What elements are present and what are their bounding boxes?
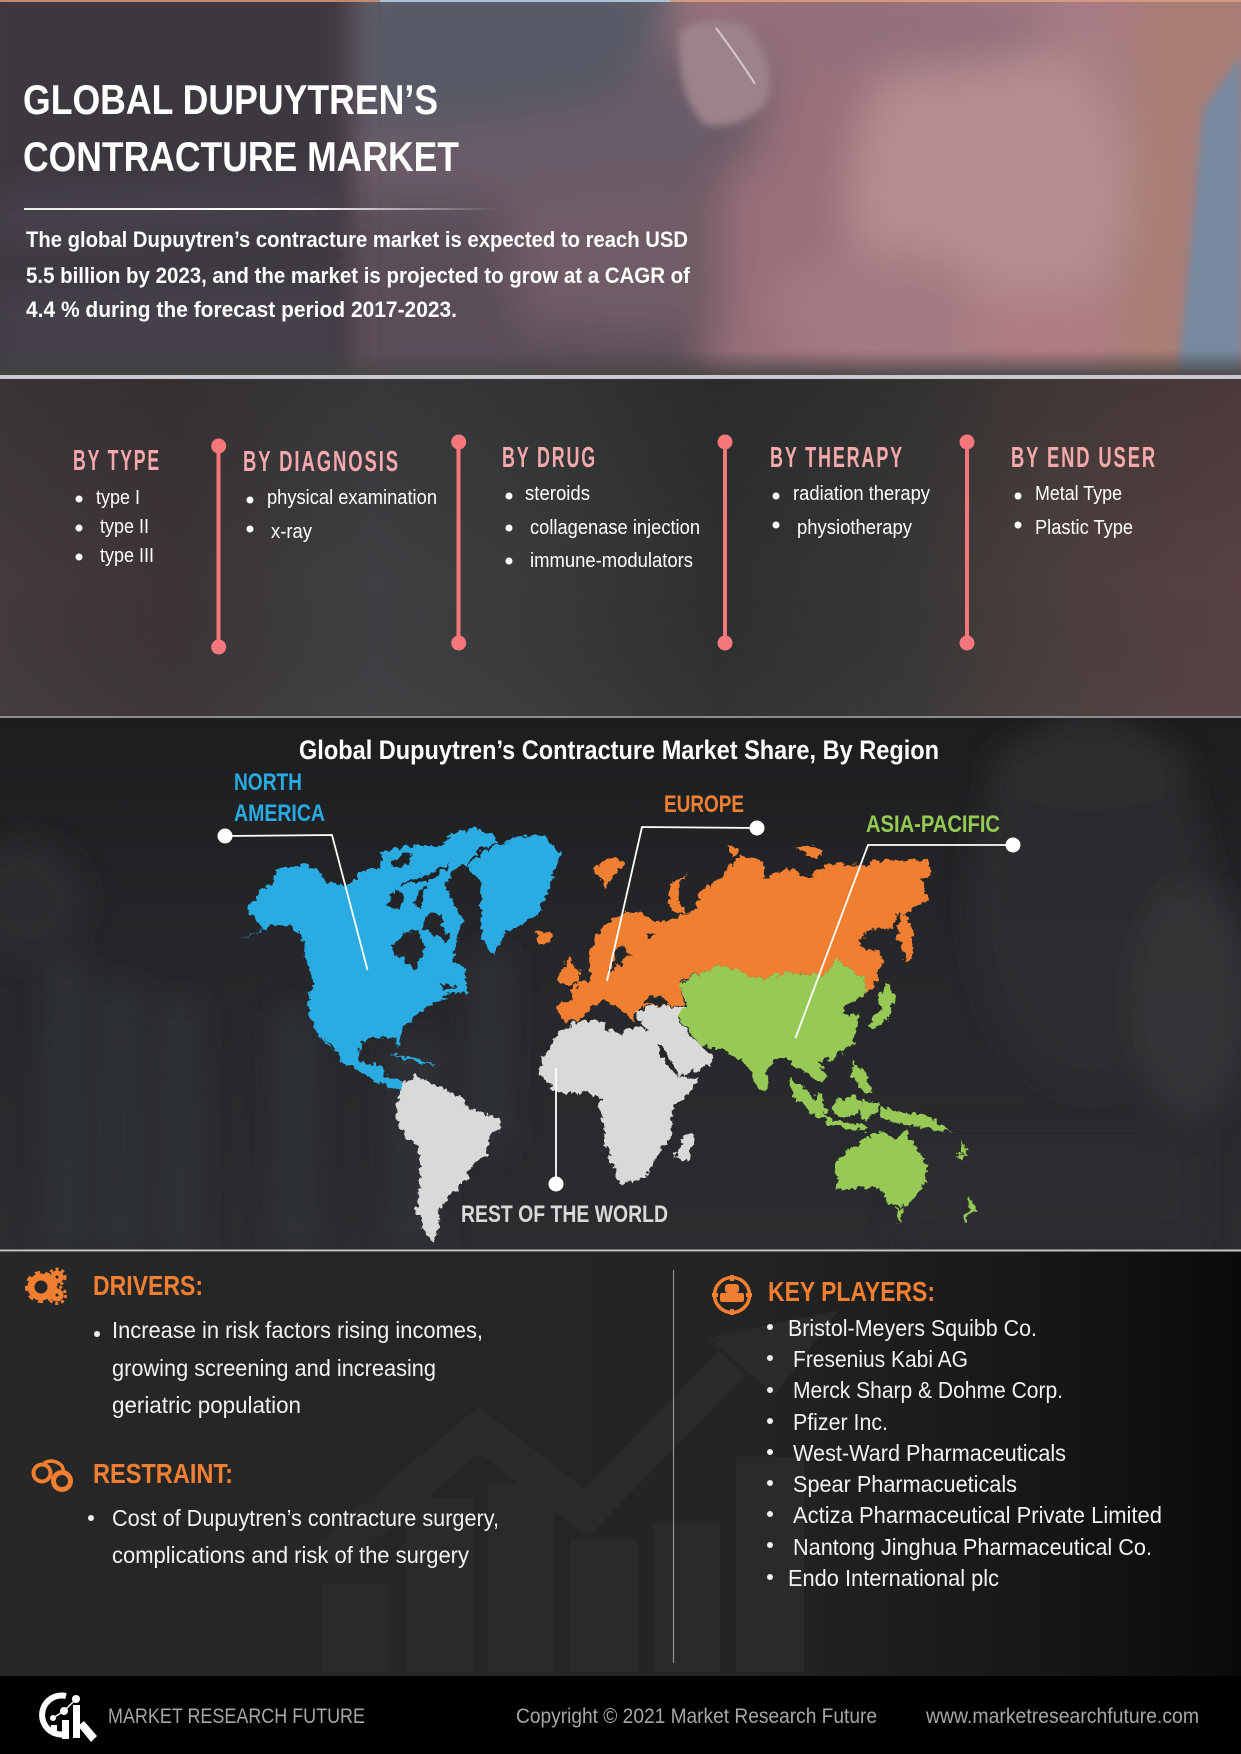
segment: by drug: collagenase injection xyxy=(530,517,700,539)
icon: gears xyxy=(27,1269,66,1304)
segment: by end user: BY END USER xyxy=(1011,442,1157,474)
segment: by therapy: radiation therapy xyxy=(793,483,930,505)
panel: market segmentation xyxy=(0,375,1241,718)
callout: North America: NORTH xyxy=(234,769,302,796)
map region: Rest of the World xyxy=(393,1005,712,1240)
divider pin 2 xyxy=(451,434,466,650)
title: CONTRACTURE MARKET xyxy=(23,133,459,180)
key players block: KEY PLAYERS: xyxy=(768,1276,935,1307)
key player list: Fresenius Kabi AG xyxy=(793,1346,968,1372)
segment: by type xyxy=(73,445,161,567)
intro text: 4.4 % during the forecast period 2017-2023. xyxy=(26,297,457,322)
footer xyxy=(0,1676,1241,1754)
key player list xyxy=(767,1315,1162,1591)
segment: by type: type II xyxy=(100,516,149,538)
footer: www.marketresearchfuture.com xyxy=(925,1705,1199,1728)
restraint block: Cost of Dupuytren’s contracture surgery, xyxy=(112,1505,499,1531)
key player list: Spear Pharmacueticals xyxy=(793,1471,1017,1497)
title xyxy=(23,76,459,180)
divider pin 1 xyxy=(211,438,226,654)
title: GLOBAL DUPUYTREN’S xyxy=(23,76,438,123)
map region: Europe and Russia xyxy=(531,843,929,1020)
key player list: Endo International plc xyxy=(788,1565,999,1591)
footer: Copyright © 2021 Market Research Future xyxy=(516,1705,877,1728)
intro text xyxy=(26,227,691,322)
segment: by diagnosis xyxy=(243,446,437,543)
restraint block xyxy=(34,1458,499,1568)
icon: Market Research Future logo xyxy=(42,1695,97,1742)
segment: by therapy xyxy=(770,442,930,539)
callout: Europe: EUROPE xyxy=(664,791,744,818)
divider pin 3 xyxy=(718,434,732,650)
key player list: Merck Sharp & Dohme Corp. xyxy=(793,1377,1063,1403)
drivers block: Increase in risk factors rising incomes, xyxy=(112,1317,483,1343)
world map xyxy=(235,827,974,1240)
key player list: Pfizer Inc. xyxy=(793,1409,888,1435)
segment: by end user xyxy=(1011,442,1157,539)
segment: by drug: BY DRUG xyxy=(502,442,597,474)
callout: Rest of the World xyxy=(461,1068,668,1228)
key players block xyxy=(712,1275,1162,1591)
segment: by therapy: physiotherapy xyxy=(797,517,912,539)
segment: by therapy: BY THERAPY xyxy=(770,442,904,474)
hero background: photo of a hand xyxy=(0,0,1241,410)
divider pin 4 xyxy=(960,434,974,650)
key player list: Actiza Pharmaceutical Private Limited xyxy=(793,1502,1162,1528)
segment: by diagnosis: physical examination xyxy=(267,487,437,509)
drivers block xyxy=(27,1269,483,1418)
icon: target with person xyxy=(712,1275,752,1315)
drivers block: DRIVERS: xyxy=(93,1270,203,1301)
segment: by drug: immune-modulators xyxy=(530,550,693,572)
key player list: West-Ward Pharmaceuticals xyxy=(793,1440,1066,1466)
drivers block: growing screening and increasing xyxy=(112,1355,436,1381)
callout: Asia-Pacific: ASIA-PACIFIC xyxy=(866,811,1000,838)
panel: regional market share map xyxy=(0,710,1241,1252)
segment: by diagnosis: x-ray xyxy=(271,521,312,543)
callout: Europe xyxy=(607,791,764,981)
key player list: Bristol-Meyers Squibb Co. xyxy=(788,1315,1037,1341)
drivers block: geriatric population xyxy=(112,1392,301,1418)
intro text: The global Dupuytren’s contracture market is expected to reach USD xyxy=(26,227,688,252)
segment: by end user: Plastic Type xyxy=(1035,517,1133,539)
icon: handcuffs xyxy=(34,1461,70,1490)
callout: Asia-Pacific xyxy=(796,811,1020,1038)
restraint block: complications and risk of the surgery xyxy=(112,1542,469,1568)
panel: hero header xyxy=(0,0,1241,410)
map region: Asia-Pacific xyxy=(676,958,974,1222)
callout: North America xyxy=(218,769,368,970)
callout: Rest of the World: REST OF THE WORLD xyxy=(461,1201,668,1228)
footer: MARKET RESEARCH FUTURE xyxy=(108,1705,365,1728)
restraint block: RESTRAINT: xyxy=(93,1458,233,1489)
segment: by end user: Metal Type xyxy=(1035,483,1122,505)
key player list: Nantong Jinghua Pharmaceutical Co. xyxy=(793,1534,1152,1560)
intro text: 5.5 billion by 2023, and the market is projected to grow at a CAGR of xyxy=(26,263,691,288)
segment: by type: type III xyxy=(100,545,154,567)
segment: by diagnosis: BY DIAGNOSIS xyxy=(243,446,400,478)
panel: drivers, restraint and key players xyxy=(0,1252,1241,1676)
segment: by type: type I xyxy=(96,487,140,509)
chart title: Global Dupuytren’s Contracture Market Share, By Region xyxy=(299,735,939,765)
segment: by type: BY TYPE xyxy=(73,445,161,477)
map region: North America xyxy=(235,827,558,1087)
callout: North America: AMERICA xyxy=(234,800,325,827)
segment: by drug xyxy=(502,442,700,572)
segment: by drug: steroids xyxy=(525,483,590,505)
